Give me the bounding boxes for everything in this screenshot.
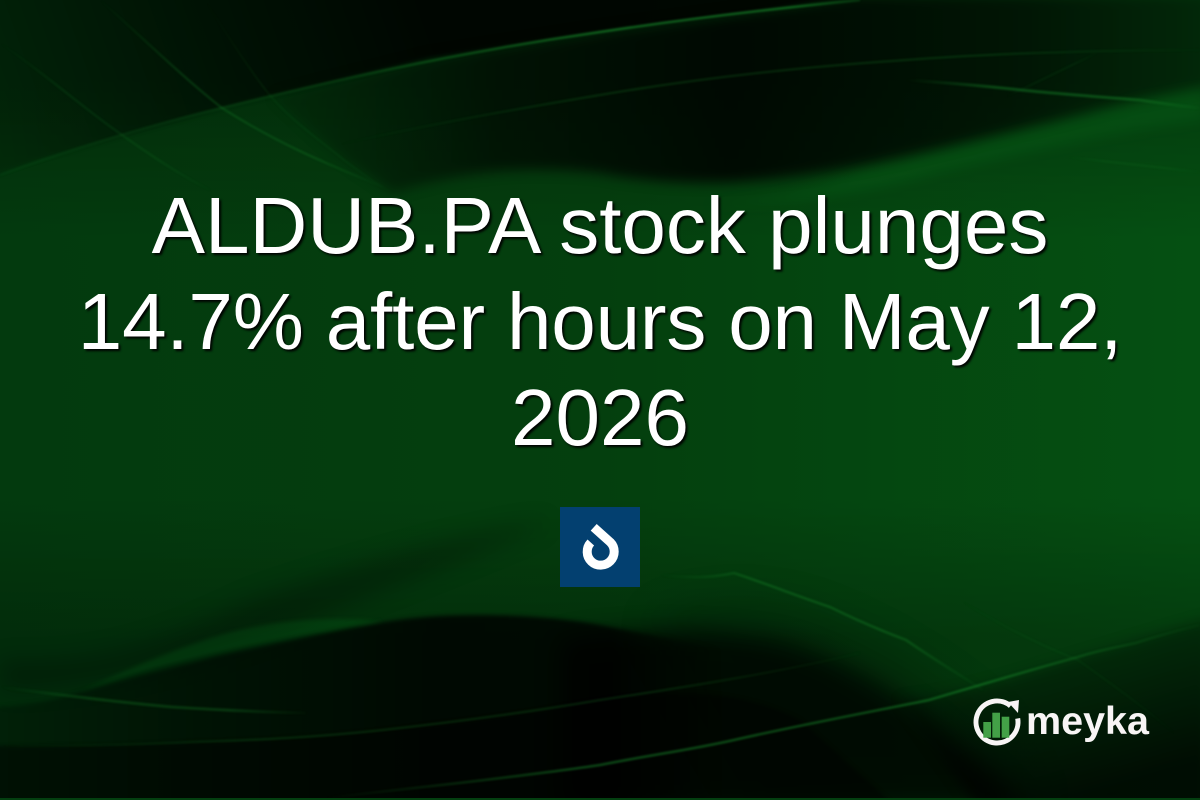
wordmark: meyka bbox=[1026, 700, 1149, 743]
band of light right top bbox=[700, 88, 1200, 205]
soft darker wisp in lower left bbox=[0, 520, 555, 690]
title: ALDUB.PA stock plunges bbox=[152, 181, 1048, 270]
band of light lower left bbox=[77, 619, 383, 693]
bottom hump bbox=[0, 615, 720, 800]
darker bottom strip under the lower line bbox=[0, 693, 900, 800]
logo: meyka bbox=[974, 698, 1150, 746]
bottom edge strip bbox=[0, 798, 1200, 800]
bottom right dark corner bbox=[900, 618, 1200, 800]
bottom soft hump shoulder bbox=[560, 631, 1025, 800]
top left darkening above the first line bbox=[0, 0, 860, 175]
icon: green bars in circular arrow bbox=[976, 700, 1019, 743]
top dark wedge bbox=[272, 0, 1200, 193]
icon: company logo, white drop on blue square bbox=[560, 507, 640, 587]
title: 14.7% after hours on May 12, bbox=[78, 277, 1122, 366]
title: 2026 bbox=[511, 373, 689, 462]
title bbox=[78, 181, 1122, 462]
